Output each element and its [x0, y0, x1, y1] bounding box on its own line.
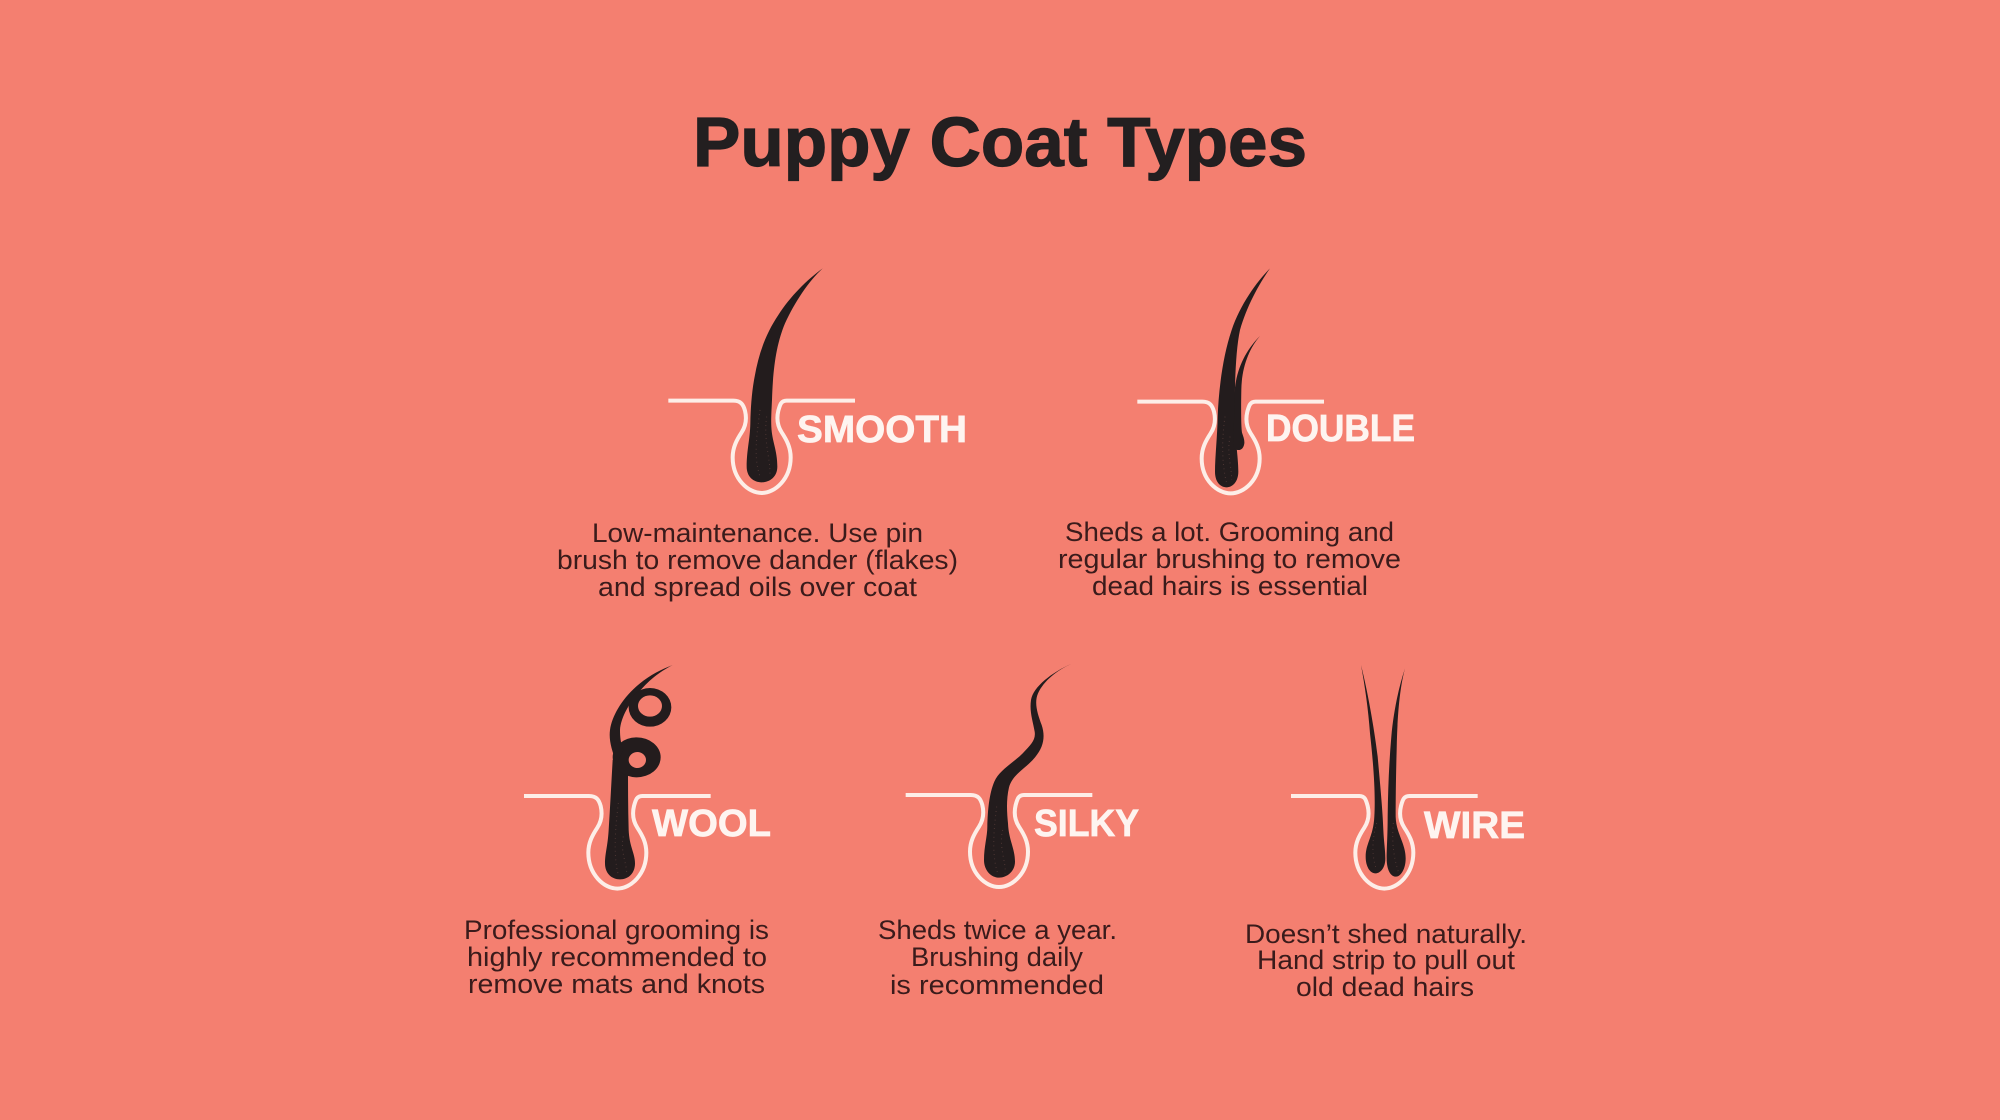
panel: silky coat — [878, 664, 1139, 1000]
description: smooth: and spread oils over coat — [598, 572, 918, 602]
description: smooth: Low-maintenance. Use pin — [592, 518, 923, 548]
label: SILKY: SILKY — [1034, 803, 1139, 845]
description: silky: is recommended — [890, 970, 1104, 1000]
title: Puppy Coat Types — [693, 103, 1307, 181]
icon: wool hair follicle — [524, 665, 711, 889]
description: wire: old dead hairs — [1296, 972, 1474, 1002]
description: wire: Doesn’t shed naturally. — [1245, 919, 1527, 949]
description: wool: highly recommended to — [467, 942, 767, 972]
label: WOOL: WOOL — [652, 803, 771, 845]
panel: double coat — [1058, 268, 1415, 601]
panel: wire coat — [1245, 665, 1527, 1002]
icon: silky hair follicle — [906, 664, 1092, 887]
description: wire: Hand strip to pull out — [1257, 945, 1516, 975]
label: WIRE: WIRE — [1424, 805, 1525, 847]
icon: wire hair follicle — [1291, 665, 1478, 889]
description: double: Sheds a lot. Grooming and — [1065, 517, 1394, 547]
description: wool — [464, 915, 769, 999]
description: wool: Professional grooming is — [464, 915, 769, 945]
description: silky: Sheds twice a year. — [878, 915, 1117, 945]
label: SMOOTH: SMOOTH — [797, 409, 967, 451]
label: DOUBLE: DOUBLE — [1266, 408, 1415, 450]
description: double: dead hairs is essential — [1092, 571, 1368, 601]
icon: smooth hair follicle — [668, 268, 855, 493]
description: double: regular brushing to remove — [1058, 544, 1401, 574]
description: wool: remove mats and knots — [468, 969, 765, 999]
description: silky — [878, 915, 1117, 1000]
description: smooth — [557, 518, 958, 602]
panel: wool coat — [464, 665, 771, 999]
description: silky: Brushing daily — [911, 942, 1084, 972]
icon: double hair follicle — [1137, 268, 1324, 493]
description: smooth: brush to remove dander (flakes) — [557, 545, 958, 575]
panel: smooth coat — [557, 268, 967, 602]
description: wire — [1245, 919, 1527, 1002]
description: double — [1058, 517, 1401, 601]
